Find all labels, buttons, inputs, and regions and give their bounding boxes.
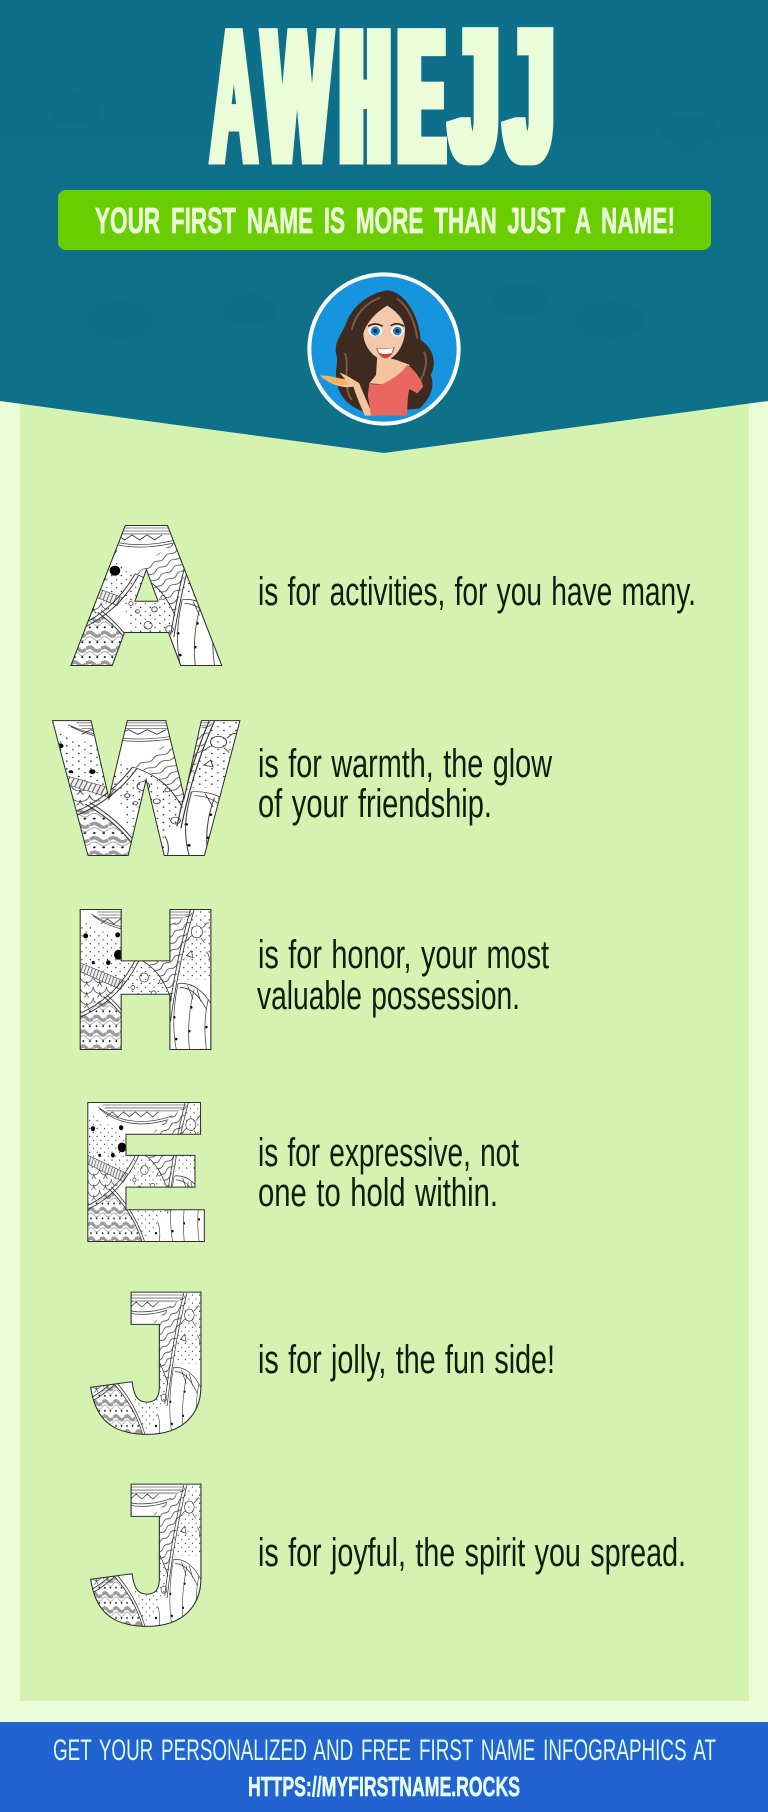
header banner	[0, 0, 768, 453]
footer URL: HTTPS://MYFIRSTNAME.ROCKS	[248, 1771, 520, 1802]
letter W illustration: W	[60, 687, 233, 889]
letter W row	[49, 687, 552, 889]
letter A illustration: A	[74, 492, 219, 701]
letter J row	[89, 1257, 555, 1467]
letter A row	[69, 492, 696, 701]
line for J: is for jolly, the fun side!	[258, 1338, 555, 1382]
lines for W: is for warmth, the glow	[258, 742, 552, 786]
tagline bar	[58, 190, 711, 250]
letter H illustration	[80, 909, 212, 1050]
lines for E: is for expressive, not	[258, 1131, 519, 1175]
content panel	[20, 380, 749, 1701]
letter J illustration	[90, 1292, 202, 1435]
second letter J illustration	[90, 1484, 202, 1627]
avatar: woman in red shirt	[309, 274, 459, 424]
letter H illustration: H	[73, 876, 219, 1084]
second letter J illustration: J	[94, 1449, 209, 1659]
letter E row	[81, 1068, 519, 1276]
letter J illustration: J	[94, 1257, 209, 1467]
lines for E: one to hold within.	[258, 1171, 498, 1215]
second letter J row	[90, 1484, 684, 1627]
lines for W: of your friendship.	[258, 782, 492, 826]
letter E illustration: E	[81, 1068, 206, 1276]
footer	[0, 1722, 768, 1812]
letter H row	[73, 876, 549, 1084]
lines for H: valuable possession.	[257, 974, 520, 1018]
title	[211, 0, 553, 202]
letter E illustration	[87, 1102, 205, 1242]
letter A illustration	[70, 525, 222, 666]
lines for H: is for honor, your most	[258, 933, 549, 977]
letter W illustration	[52, 720, 241, 856]
